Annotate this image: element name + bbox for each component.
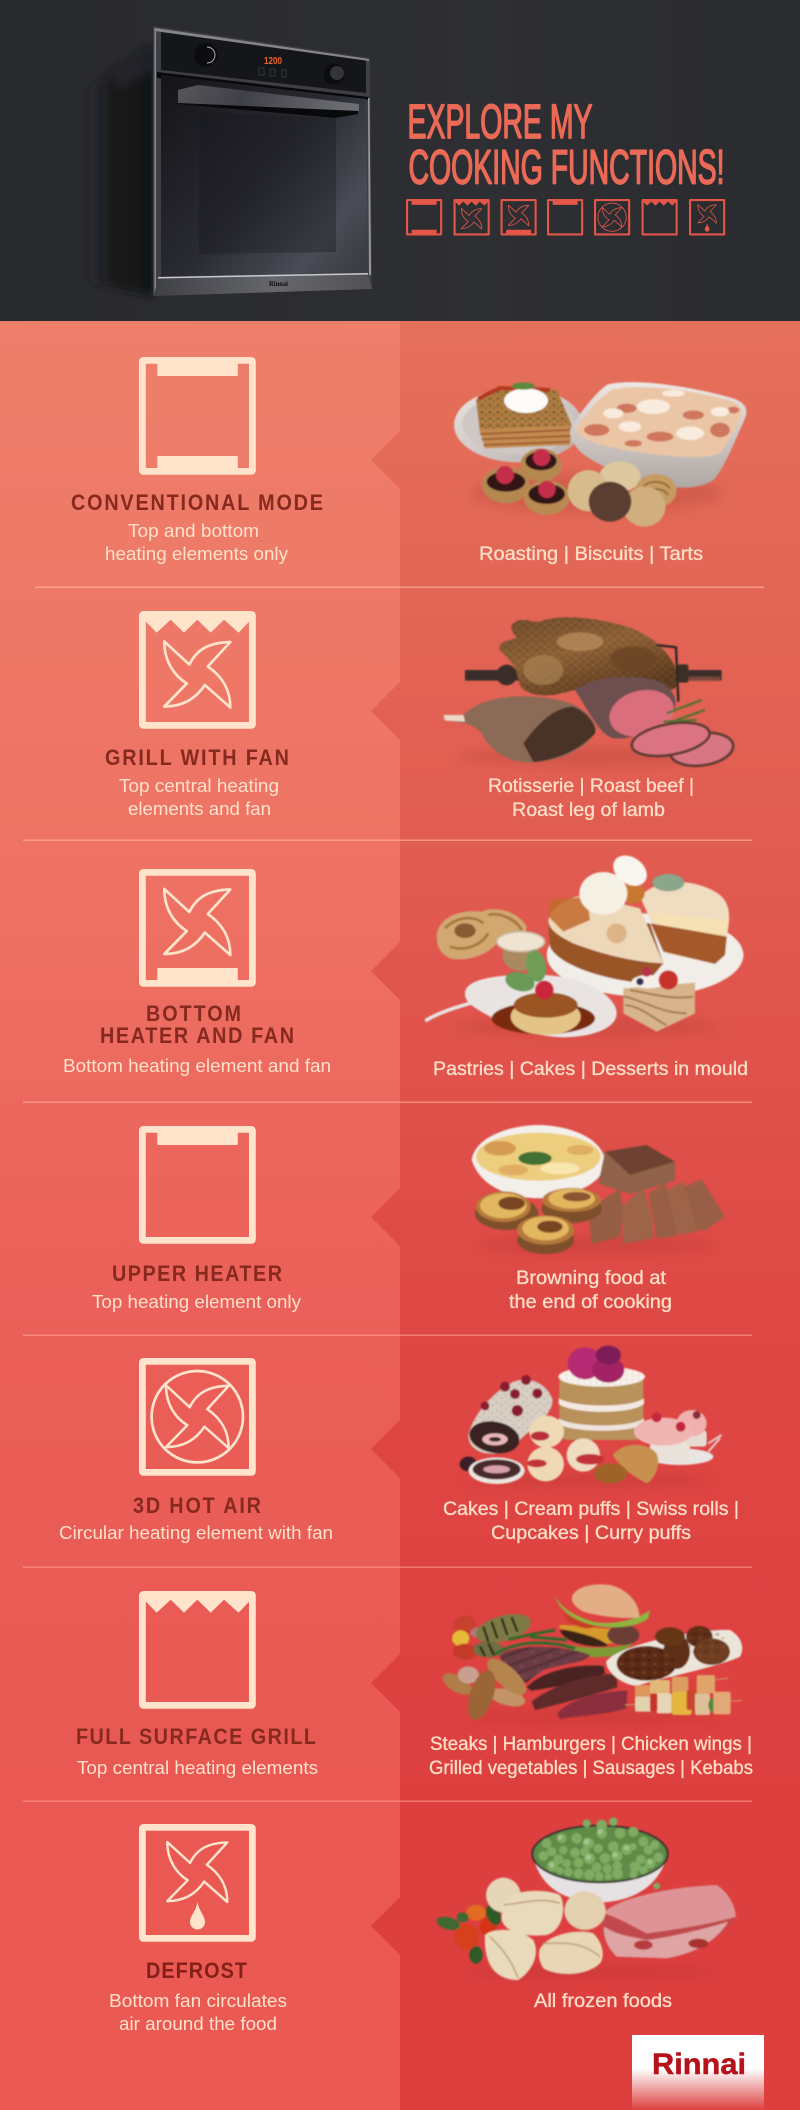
heading: DEFROST bbox=[146, 1959, 247, 1983]
icon: 3D hot air bbox=[142, 1361, 252, 1472]
heading: HEATER AND FAN bbox=[100, 1024, 294, 1048]
description: Top central heating bbox=[119, 775, 279, 796]
description: heating elements only bbox=[105, 543, 289, 564]
description bbox=[119, 775, 279, 819]
food: quiche, egg tarts, layer cake bbox=[472, 1125, 725, 1254]
mini icon: upper heater bbox=[548, 200, 582, 234]
arrow bbox=[371, 1419, 401, 1479]
section: grill with fan bbox=[105, 614, 735, 821]
icon: defrost bbox=[142, 1827, 252, 1938]
oven brand mark: Rinnai bbox=[269, 280, 288, 288]
heading: FULL SURFACE GRILL bbox=[76, 1725, 316, 1749]
mini icon: grill with fan bbox=[455, 200, 489, 234]
food label: Cakes | Cream puffs | Swiss rolls | bbox=[443, 1498, 739, 1520]
function icon row bbox=[407, 200, 724, 235]
food label: Browning food at bbox=[516, 1267, 667, 1289]
panel: dark oven header bbox=[0, 0, 800, 321]
steak bbox=[495, 1630, 627, 1719]
oven touch buttons bbox=[259, 68, 286, 77]
section: upper heater bbox=[92, 1125, 725, 1313]
mini icon: 3D hot air bbox=[595, 200, 629, 234]
food label: Roasting | Biscuits | Tarts bbox=[479, 543, 703, 565]
food label: Rotisserie | Roast beef | bbox=[488, 775, 694, 797]
food label: Pastries | Cakes | Desserts in mould bbox=[433, 1058, 748, 1080]
heading: UPPER HEATER bbox=[112, 1262, 282, 1286]
description: Bottom fan circulates bbox=[109, 1990, 287, 2011]
description: Top heating element only bbox=[92, 1291, 302, 1312]
title: EXPLORE MY bbox=[408, 96, 592, 149]
heading: BOTTOM bbox=[146, 1002, 241, 1026]
divider bbox=[23, 1800, 752, 1802]
title bbox=[408, 96, 724, 194]
arrow bbox=[371, 681, 401, 741]
section: defrost bbox=[109, 1817, 736, 2034]
arrow bbox=[371, 1896, 401, 1956]
kebabs bbox=[625, 1675, 742, 1715]
icon: grill with fan bbox=[142, 614, 252, 725]
icon: upper heater bbox=[142, 1128, 252, 1240]
mini icon: defrost bbox=[690, 200, 724, 234]
divider bbox=[35, 586, 764, 588]
section: bottom heater and fan bbox=[63, 849, 748, 1080]
section: full surface grill bbox=[76, 1584, 753, 1779]
arrow bbox=[371, 1187, 401, 1247]
food: swiss roll, naked cake, cream puffs, cupcakes bbox=[460, 1346, 722, 1487]
food: peas, dumplings, frozen meat bbox=[435, 1817, 736, 1980]
icon: conventional mode bbox=[142, 359, 252, 474]
panel: right gradient column bbox=[400, 320, 800, 2110]
panel: left gradient column bbox=[0, 320, 400, 2110]
divider bbox=[23, 1566, 752, 1568]
description: Bottom heating element and fan bbox=[63, 1055, 331, 1076]
divider bbox=[23, 1102, 752, 1103]
logo: Rinnai: Rinnai bbox=[652, 2048, 746, 2081]
grilled vegetables bbox=[452, 1609, 534, 1660]
icon: full surface grill bbox=[142, 1594, 252, 1705]
heading bbox=[100, 1002, 294, 1048]
food label: Roast leg of lamb bbox=[512, 799, 665, 821]
description: Circular heating element with fan bbox=[59, 1522, 333, 1543]
oven illustration bbox=[85, 26, 372, 296]
logo: Rinnai bbox=[632, 2035, 764, 2110]
description bbox=[105, 520, 289, 564]
food label: the end of cooking bbox=[509, 1291, 672, 1313]
food: steak, burger, wings, sausages, kebabs bbox=[439, 1584, 742, 1723]
arrow bbox=[371, 1653, 401, 1713]
section: 3D hot air bbox=[59, 1346, 739, 1544]
food: rotisserie chicken, roast beef, lamb bbox=[443, 617, 735, 770]
chicken wings on plate bbox=[606, 1626, 742, 1686]
burger bbox=[555, 1584, 650, 1657]
food label bbox=[509, 1267, 672, 1313]
description: Top central heating elements bbox=[77, 1757, 318, 1778]
food: cake, flan, pastries bbox=[427, 849, 743, 1037]
mini icon: conventional bbox=[407, 200, 441, 235]
oven knob left bbox=[194, 43, 218, 67]
arrow bbox=[371, 941, 401, 1001]
mini icon: full surface grill bbox=[643, 200, 677, 234]
food label bbox=[443, 1498, 739, 1544]
food label: All frozen foods bbox=[534, 1990, 672, 2012]
divider bbox=[23, 840, 752, 841]
description bbox=[109, 1990, 287, 2034]
heading: GRILL WITH FAN bbox=[105, 746, 289, 770]
description: Top and bottom bbox=[128, 520, 259, 541]
sausages bbox=[439, 1653, 532, 1723]
food: lasagne, bake, tarts, biscuits bbox=[454, 382, 746, 527]
section: conventional mode bbox=[71, 359, 746, 565]
mini icon: bottom heater and fan bbox=[502, 200, 536, 235]
food label bbox=[429, 1733, 753, 1779]
food label: Steaks | Hamburgers | Chicken wings | bbox=[430, 1733, 752, 1755]
food label: Grilled vegetables | Sausages | Kebabs bbox=[429, 1757, 753, 1779]
oven knob right bbox=[324, 64, 344, 84]
description: elements and fan bbox=[128, 798, 271, 819]
arrow bbox=[371, 430, 401, 490]
heading: 3D HOT AIR bbox=[133, 1494, 261, 1518]
food label bbox=[488, 775, 694, 821]
icon: bottom heater and fan bbox=[142, 872, 252, 986]
divider bbox=[23, 1334, 752, 1336]
heading: CONVENTIONAL MODE bbox=[71, 491, 323, 515]
description: air around the food bbox=[119, 2013, 277, 2034]
oven display: 1200 bbox=[264, 56, 282, 67]
food label: Cupcakes | Curry puffs bbox=[491, 1522, 691, 1544]
